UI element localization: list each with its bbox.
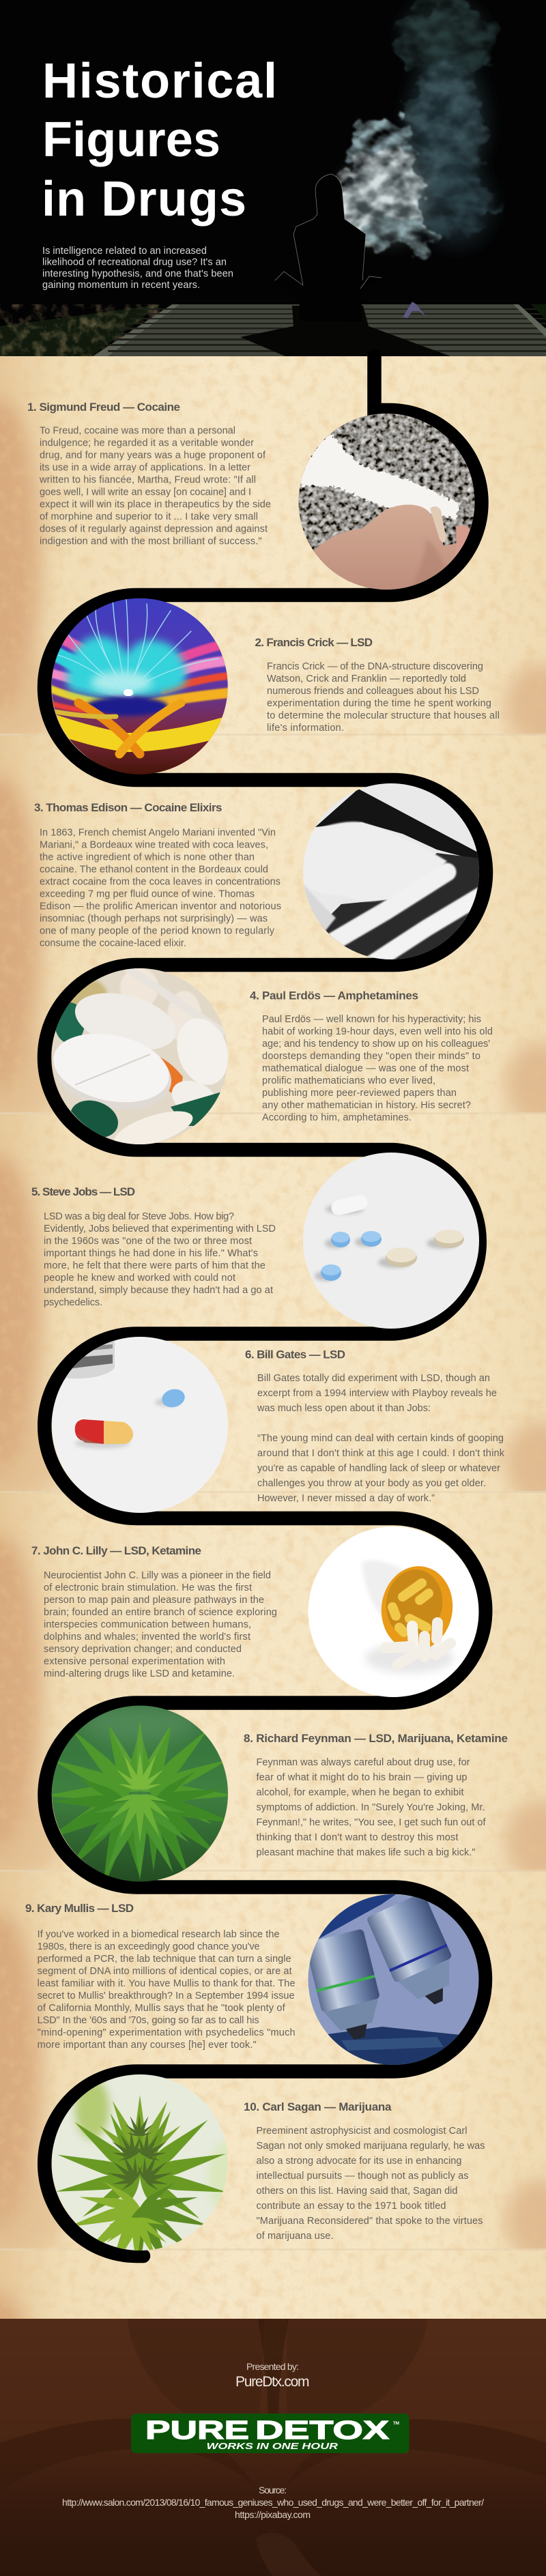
body text: Feynman!," he writes, "You see, I get such fun out of	[257, 1817, 486, 1828]
body text	[44, 1570, 277, 1679]
heading: 4. Paul Erdös — Amphetamines	[250, 989, 418, 1002]
body text: was much less open about it than Jobs:	[257, 1403, 431, 1414]
body text: any other mathematician in history. His secret?	[262, 1100, 471, 1111]
image: cannabis plant	[52, 1706, 228, 1882]
body text: of electronic brain stimulation. He was the first	[44, 1582, 252, 1593]
body text: segment of DNA into millions of identical copies, or are at	[38, 1966, 292, 1977]
body text: Bill Gates totally did experiment with LSD, though an	[257, 1373, 490, 1384]
body text: habit of working 19-hour days, even well into his old	[262, 1026, 493, 1037]
body text: prolific mathematicians who ever lived,	[262, 1075, 435, 1086]
body text	[257, 1373, 505, 1504]
heading: 9. Kary Mullis — LSD	[25, 1902, 134, 1915]
sources: https://pixabay.com	[235, 2509, 311, 2520]
hero photo: boardwalk and grass	[0, 304, 546, 356]
logo: Pure Detox	[131, 2414, 410, 2453]
body text: pleasant machine that makes life such a big kick."	[257, 1847, 475, 1858]
image: white and green pills	[52, 968, 228, 1144]
body text: extensive personal experimentation with	[44, 1656, 225, 1667]
hero photo: smoke	[339, 0, 498, 252]
body text: psychedelics.	[44, 1297, 102, 1308]
body text: more, he felt that there were parts of him that the	[44, 1260, 265, 1271]
body text: 1980s, there is an exceedingly good chance you've	[38, 1941, 260, 1952]
panel: hero header	[0, 0, 546, 356]
body text: others on this list. Having said that, Sagan did	[257, 2186, 457, 2197]
body text: "mind-opening" experimentation with psychedelics "much	[38, 2027, 296, 2038]
presented by	[235, 2361, 310, 2390]
body text: goes well, I will write an essay [on cocaine] and I	[40, 487, 251, 498]
body text: Feynman was always careful about drug use, for	[257, 1757, 470, 1768]
title: Historical	[42, 54, 277, 108]
body text	[38, 1929, 296, 2051]
image: psychedelic swirl	[48, 598, 232, 775]
body text	[267, 661, 500, 734]
body text: expect it will win its place in therapeutics by the side	[40, 500, 271, 510]
body text: Mariani," a Bordeaux wine treated with coca leaves,	[40, 839, 268, 850]
heading: 7. John C. Lilly — LSD, Ketamine	[31, 1544, 201, 1557]
body text	[262, 1014, 493, 1123]
body text: age; and his tendency to show up on his colleagues'	[262, 1039, 490, 1050]
body text: extract cocaine from the coca leaves in concentrations	[40, 876, 281, 887]
logo: Pure Detox: PURE	[145, 2416, 249, 2445]
logo: Pure Detox: WORKS IN ONE HOUR	[206, 2442, 338, 2451]
hero photo: dropped lighter	[403, 302, 426, 318]
heading: 8. Richard Feynman — LSD, Marijuana, Ketamine	[244, 1732, 508, 1745]
intro text: likelihood of recreational drug use? It's an	[42, 257, 227, 268]
body text: cocaine. The ethanol content in the Bordeaux could	[40, 864, 268, 875]
title	[42, 54, 277, 227]
image: white powder lines	[303, 783, 481, 964]
body text: written to his fiancée, Martha, Freud wrote: "If all	[39, 475, 256, 486]
heading: 10. Carl Sagan — Marijuana	[244, 2100, 392, 2113]
body text: important things he had done in his life." What's	[44, 1248, 258, 1259]
body text: mathematical dialogue — was one of the most	[262, 1063, 469, 1074]
body text: to determine the molecular structure that houses all	[267, 710, 500, 721]
body text: interspecies communication between humans,	[44, 1619, 251, 1630]
sources	[62, 2485, 484, 2520]
heading: 5. Steve Jobs — LSD	[31, 1185, 135, 1198]
body text: brain; founded an entire branch of science exploring	[44, 1607, 277, 1618]
book photo backdrop	[0, 2319, 546, 2576]
body text: symptoms of addiction. In "Surely You're Joking, Mr.	[257, 1802, 485, 1813]
body text: people he knew and worked with could not	[44, 1273, 235, 1284]
body text: To Freud, cocaine was more than a personal	[40, 426, 235, 437]
body text: "Marijuana Reconsidered" that spoke to the virtues	[257, 2216, 483, 2227]
body text: in the 1960s was "one of the two or three most	[44, 1236, 252, 1247]
body text: experimentation during the time he spent working	[267, 698, 491, 709]
body text	[39, 426, 271, 547]
body text: exceeding 7 mg per fluid ounce of wine. Thomas	[40, 888, 255, 899]
body text: life's information.	[267, 723, 344, 734]
presented by: Presented by:	[246, 2361, 299, 2372]
heading: 2. Francis Crick — LSD	[255, 636, 373, 649]
body text: insomniac (though perhaps not surprisingly) — was	[40, 913, 268, 924]
serpentine black path	[44, 356, 486, 2256]
parchment background	[0, 356, 546, 2319]
panel: 2 Francis Crick	[48, 598, 500, 775]
body text: LSD" In the '60s and '70s, going so far as to call his	[38, 2015, 259, 2026]
body text: of marijuana use.	[257, 2231, 333, 2242]
body text: If you've worked in a biomedical research lab since the	[38, 1929, 280, 1940]
body text: indigestion and with the most brilliant of success."	[40, 536, 262, 547]
body text: one of many people of the period known to regularly	[40, 925, 275, 936]
body text: excerpt from a 1994 interview with Playboy reveals he	[257, 1388, 497, 1399]
body text: mind-altering drugs like LSD and ketamine.	[44, 1668, 235, 1679]
logo: Pure Detox: DETOX	[255, 2416, 390, 2445]
body text: Preeminent astrophysicist and cosmologist Carl	[257, 2126, 467, 2137]
heading: 6. Bill Gates — LSD	[245, 1348, 345, 1361]
body text: In 1863, French chemist Angelo Mariani invented "Vin	[40, 827, 276, 838]
body text: of California Monthly, Mullis says that he "took plenty of	[38, 2003, 286, 2014]
body text: challenges you throw at your body as you get older.	[257, 1478, 486, 1489]
body text: Evidently, Jobs believed that experimenting with LSD	[44, 1224, 276, 1234]
panel: 9 Kary Mullis	[25, 1892, 480, 2068]
body text: its use in a wide array of applications. In a letter	[40, 463, 250, 474]
logo: Pure Detox: TM	[393, 2422, 399, 2426]
hero photo: seated silhouette	[275, 174, 382, 322]
body text	[257, 2126, 485, 2242]
panel: 5 Steve Jobs	[31, 1153, 480, 1330]
panel: 1 Sigmund Freud	[27, 401, 478, 594]
image: spilled pill bottle	[308, 1526, 480, 1698]
body text: more important than any courses [he] ever took."	[38, 2040, 257, 2051]
body text: doorsteps demanding they "open their minds" to	[262, 1051, 480, 1062]
presented by: PureDtx.com	[235, 2374, 310, 2390]
body text	[44, 1211, 276, 1308]
body text: Paul Erdös — well known for his hyperactivity; his	[262, 1014, 481, 1025]
sources: Source:	[259, 2485, 287, 2495]
image: powder on granite	[295, 414, 478, 594]
body text: thinking that I don't want to destroy this most	[257, 1832, 459, 1843]
heading: 1. Sigmund Freud — Cocaine	[27, 401, 180, 414]
body text: “The young mind can deal with certain kinds of gooping	[257, 1433, 504, 1444]
body text: least familiar with it. You have Mullis to thank for that. The	[38, 1978, 296, 1989]
title: in Drugs	[42, 172, 246, 227]
intro text: gaining momentum in recent years.	[42, 280, 200, 291]
image: cannabis bud	[43, 2074, 242, 2294]
body text: sensory deprivation changer; and conducted	[44, 1644, 242, 1655]
body text: drug, and for many years was a huge proponent of	[40, 450, 266, 461]
body text: publishing more peer-reviewed papers than	[262, 1088, 457, 1099]
body text: alcohol, for example, when he began to exhibit	[257, 1787, 464, 1798]
panel: footer	[0, 2319, 546, 2576]
body text: indulgence; he regarded it as a veritable wonder	[40, 438, 254, 449]
body text: fear of what it might do to his brain — giving up	[257, 1772, 467, 1783]
panel: 8 Richard Feynman	[52, 1706, 508, 1882]
panel: 6 Bill Gates	[51, 1337, 505, 1514]
body text: dolphins and whales; invented the world's first	[44, 1632, 250, 1642]
body text: the active ingredient of which is none other than	[40, 852, 255, 863]
body text: According to him, amphetamines.	[262, 1112, 412, 1123]
body text: Sagan not only smoked marijuana regularly, he was	[257, 2141, 485, 2152]
panel: 10 Carl Sagan	[43, 2074, 485, 2294]
panel: 3 Thomas Edison	[34, 783, 481, 964]
body text: Edison — the prolific American inventor and notorious	[40, 901, 281, 912]
body text: However, I never missed a day of work.”	[257, 1493, 435, 1504]
title: Figures	[42, 113, 220, 167]
body text: contribute an essay to the 1971 book titled	[257, 2201, 446, 2212]
body text: consume the cocaine-laced elixir.	[40, 938, 186, 949]
panel: 4 Paul Erdos	[46, 968, 493, 1155]
body text: performed a PCR, the lab technique that can turn a single	[38, 1954, 291, 1965]
body text: numerous friends and colleagues about his LSD	[267, 686, 479, 697]
body text: person to map pain and pleasure pathways in the	[44, 1595, 264, 1606]
body text: doses of it regularly against depression and against	[40, 523, 268, 534]
body text	[257, 1757, 486, 1858]
body text: Watson, Crick and Franklin — reportedly told	[267, 674, 466, 684]
body text: Francis Crick — of the DNA-structure discovering	[267, 661, 483, 672]
heading: 3. Thomas Edison — Cocaine Elixirs	[34, 801, 222, 814]
body text: also a strong advocate for its use in enhancing	[257, 2156, 461, 2167]
body text: understand, simply because they hadn't had a go at	[44, 1285, 273, 1296]
body text: intellectual pursuits — though not as publicly as	[257, 2171, 468, 2182]
panel: 7 John C. Lilly	[31, 1526, 480, 1698]
image: capsule and pill	[51, 1337, 229, 1514]
intro text: Is intelligence related to an increased	[42, 246, 207, 257]
body text: LSD was a big deal for Steve Jobs. How big?	[44, 1211, 234, 1222]
image: microscope objectives	[304, 1892, 480, 2068]
body text: you're as capable of handling lack of sleep or whatever	[257, 1463, 500, 1474]
intro text	[42, 246, 233, 291]
sources: http://www.salon.com/2013/08/16/10_famous_geniuses_who_used_drugs_and_were_better_off_for_it_partner/	[62, 2497, 484, 2508]
body text	[40, 827, 281, 949]
body text: around that I don't think at this age I could. I don't think	[257, 1448, 505, 1459]
body text: of morphine and superior to it ... I take very small	[40, 512, 258, 523]
image: scattered pills	[303, 1153, 480, 1330]
body text: secret to Mullis' breakthrough? In a September 1994 issue	[38, 1991, 295, 2001]
intro text: interesting hypothesis, and one that's been	[42, 268, 233, 279]
body text: Neurocientist John C. Lilly was a pioneer in the field	[44, 1570, 271, 1581]
